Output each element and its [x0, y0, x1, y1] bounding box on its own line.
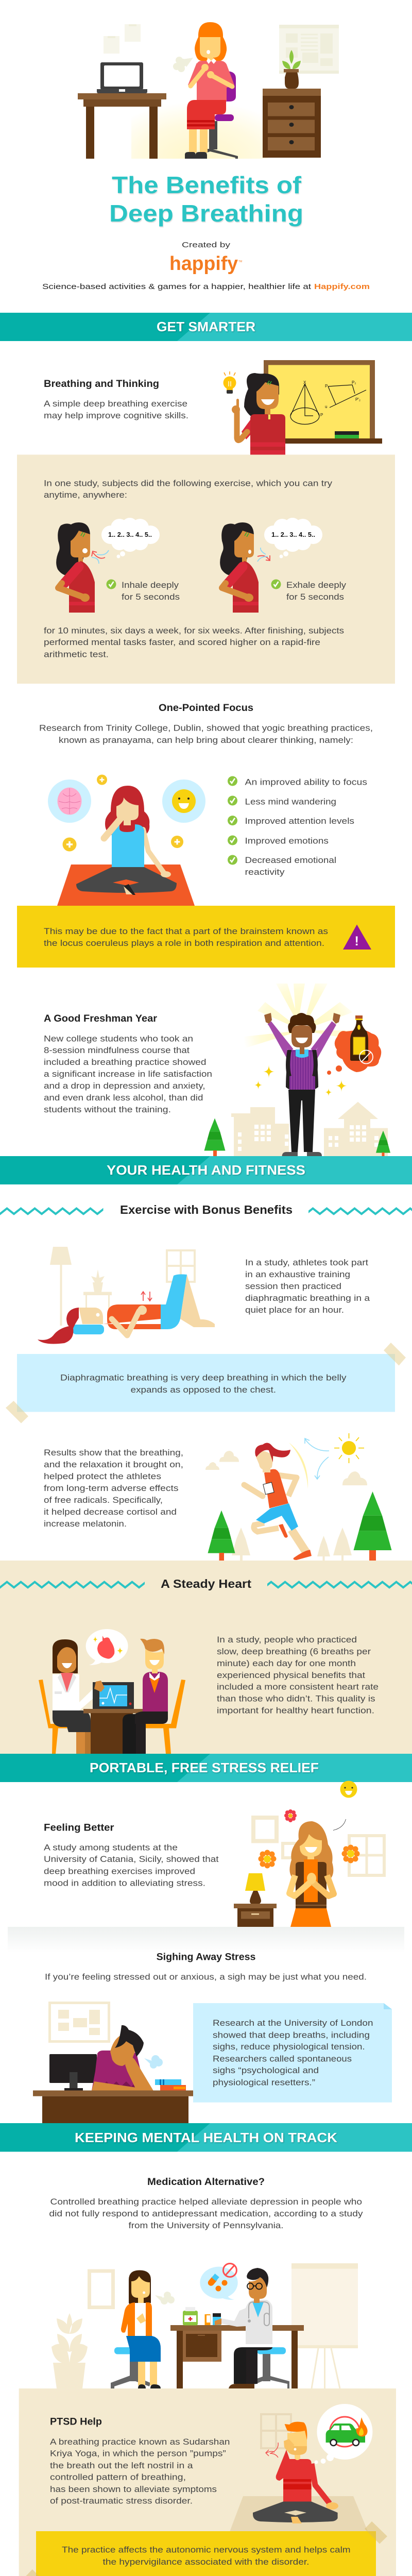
computer monitor [49, 2054, 97, 2091]
breath puff [155, 2292, 175, 2304]
clouds [205, 1451, 367, 1485]
heart study text: important for healthy heart function. [217, 1705, 374, 1716]
wall board [49, 2003, 109, 2041]
heart study text [217, 1635, 379, 1716]
callout: locus coeruleus [17, 906, 395, 968]
heart study text: In a study, people who practiced [217, 1635, 357, 1645]
heart study text: experienced physical benefits that [217, 1670, 365, 1680]
exhale label: Exhale deeply [286, 580, 347, 590]
PTSD text: of post-traumatic stress disorder. [50, 2496, 193, 2506]
exhale label: for 5 seconds [286, 592, 344, 602]
logo: happify: TM [238, 260, 242, 263]
callout: diaphragmatic breathing definition: Diaphragmatic breathing is very deep breathing in which the belly [60, 1373, 347, 1383]
exhale label [271, 579, 347, 602]
smiley balloon [333, 1781, 357, 1830]
benefit list [228, 776, 367, 877]
medication text: Controlled breathing practice helped alleviate depression in people who [50, 2197, 362, 2207]
woman doctor [53, 1639, 100, 1754]
results text: it helped decrease cortisol and [44, 1507, 177, 1517]
section: feeling better [44, 1781, 384, 1927]
woman [289, 1821, 334, 1927]
feeling better text: deep breathing exercises improved [44, 1867, 195, 1876]
title: The Benefits of [112, 172, 302, 198]
callout: autonomic nervous system: The practice affects the autonomic nervous system and helps calm [62, 2545, 351, 2554]
flowers [259, 1809, 359, 1868]
feeling better text [44, 1843, 219, 1888]
banner: your health and fitness: YOUR HEALTH AND FITNESS [107, 1162, 305, 1178]
scene: man breathing [230, 2404, 372, 2531]
chalkboard: X [303, 380, 306, 385]
arrows: belly rising [141, 1292, 152, 1301]
benefit list: Less mind wandering [245, 796, 336, 807]
logo: happify: happify [169, 253, 238, 275]
medication text [49, 2197, 363, 2230]
heading: A Steady Heart [161, 1577, 251, 1590]
title [109, 172, 303, 227]
scene: lying woman belly breathing [38, 1247, 215, 1344]
scene: doctor and patient [39, 1629, 185, 1754]
exercise result: arithmetic test. [44, 649, 109, 659]
thought bubble: car fire [314, 2404, 372, 2464]
exercise result: performed mental tasks faster, and scored higher on a rapid-fire [44, 637, 320, 647]
focus text [39, 723, 373, 745]
icon: warning triangle [343, 924, 371, 950]
panel: breathing exercise [17, 454, 395, 684]
sparkles [254, 1065, 347, 1096]
feeling better text: mood in addition to alleviating stress. [44, 1878, 205, 1888]
woman [185, 22, 234, 159]
created by: Created by [182, 241, 231, 249]
callout: autonomic nervous system: the hypervigilance associated with the disorder. [103, 2557, 309, 2567]
chair [196, 71, 238, 159]
callout: London research: physiological resetters.” [213, 2078, 315, 2088]
freshman text: a significant increase in life satisfaction [44, 1069, 212, 1079]
heading [0, 1577, 412, 1590]
icon: light bulb [224, 371, 236, 394]
medication text: from the University of Pennsylvania. [129, 2221, 283, 2230]
panel: PTSD help [19, 2388, 396, 2576]
banner: get smarter [0, 313, 412, 341]
focus text: Research from Trinity College, Dublin, showed that yogic breathing practices, [39, 723, 373, 733]
runner [244, 1443, 312, 1560]
heading: PTSD Help [50, 2416, 102, 2428]
exercise intro: anytime, anywhere: [44, 490, 127, 500]
trees [208, 1492, 391, 1561]
table [170, 2325, 304, 2388]
tagline: Happify.com [314, 283, 370, 291]
section: a good freshman year [44, 984, 390, 1156]
feeling better text: A study among students at the [44, 1843, 178, 1853]
section: sighing away stress [8, 1927, 404, 2123]
tagline: Science-based activities & games for a happier, healthier life at [42, 283, 311, 291]
inhale figure [56, 518, 160, 613]
intro text [44, 399, 188, 420]
results text: and the relaxation it brought on, [44, 1460, 183, 1469]
banner: get smarter: GET SMARTER [157, 319, 255, 334]
chalkboard: P′₂ [355, 397, 360, 402]
books [155, 2079, 186, 2091]
benefit list: Improved attention levels [245, 816, 354, 826]
exercise result: for 10 minutes, six days a week, for six weeks. After finishing, subjects [44, 625, 344, 636]
heading: exercise with bonus benefits [0, 1203, 412, 1216]
athletes text: in an exhaustive training [245, 1269, 350, 1279]
nightstand and lamp [234, 1873, 277, 1927]
buildings [231, 1102, 388, 1156]
freshman text [44, 1033, 212, 1114]
chalkboard: P₂ [352, 380, 356, 385]
callout: diaphragmatic breathing definition [6, 1343, 406, 1423]
trees [204, 1118, 390, 1156]
chalkboard [264, 360, 382, 444]
desk [33, 2091, 198, 2123]
results text: Results show that the breathing, [44, 1448, 183, 1458]
banner: keeping mental health on track [0, 2123, 412, 2151]
woman lying [38, 1274, 215, 1344]
sun and air arrows [289, 1433, 364, 1489]
speech bubble: no pills [200, 2264, 238, 2300]
plus icons [63, 775, 183, 851]
sighing person [92, 2025, 153, 2091]
yoga woman [57, 786, 195, 906]
callout: London research: Research at the University of London [213, 2018, 373, 2028]
chairs [39, 1680, 185, 1754]
room decor [253, 1818, 384, 1875]
results text: from long-term adverse effects [44, 1483, 178, 1493]
heading: One-Pointed Focus [159, 702, 253, 714]
desk [78, 93, 166, 159]
scene: runner outdoors [205, 1433, 391, 1561]
feeling better text: University of Catania, Sicily, showed that [44, 1854, 219, 1864]
scene: smiling woman [234, 1781, 384, 1927]
banner: portable, free stress relief: PORTABLE, FREE STRESS RELIEF [90, 1760, 319, 1775]
callout: London research: showed that deep breaths, including [213, 2030, 370, 2040]
window and mat [230, 2414, 368, 2531]
patient chair [111, 2347, 150, 2388]
section: one-pointed focus [17, 702, 395, 968]
chalkboard: P [320, 413, 323, 417]
potted plant [282, 50, 301, 89]
doctor [215, 2268, 272, 2388]
male patient [123, 1639, 168, 1754]
heading: exercise with bonus benefits: Exercise with Bonus Benefits [120, 1203, 293, 1216]
thought bubble: no alcohol [327, 1015, 381, 1075]
meditating man [253, 2422, 338, 2523]
exercise result [44, 625, 344, 659]
focus text: known as pranayama, can help bring about clearer thinking, namely: [59, 735, 353, 745]
background glow [131, 82, 268, 159]
heart study text: than those who didn’t. This quality is [217, 1694, 375, 1704]
heart study text: minute) each day for one month [217, 1658, 356, 1668]
benefit list: reactivity [245, 867, 285, 877]
laptop [97, 62, 147, 93]
exhale figure: 1.. 2.. 3.. 4.. 5.. [271, 531, 315, 538]
results text: of free radicals. Specifically, [44, 1495, 163, 1505]
athletes text: In a study, athletes took part [245, 1258, 368, 1267]
medication text: did not fully respond to antidepressant medication, according to a study [49, 2209, 363, 2218]
callout: London research: sighs “psychological and [213, 2065, 319, 2075]
freshman text: and a drop in depression and anxiety, [44, 1081, 205, 1091]
speech bubble: heart [86, 1629, 128, 1665]
banner: portable, free stress relief [0, 1754, 412, 1782]
results text [44, 1448, 183, 1529]
heading: Feeling Better [44, 1822, 114, 1833]
callout: locus coeruleus: This may be due to the fact that a part of the brainstem known as [44, 926, 328, 936]
callout: autonomic nervous system [25, 2521, 387, 2576]
breath arrows [266, 2443, 278, 2458]
athletes text: session then practiced [245, 1281, 341, 1291]
results text: helped protect the athletes [44, 1471, 161, 1481]
PTSD text: controlled pattern of breathing, [50, 2472, 186, 2482]
heading: A Good Freshman Year [44, 1013, 157, 1024]
PTSD text: A breathing practice known as Sudarshan [50, 2437, 230, 2447]
title: Deep Breathing [109, 200, 303, 227]
scene: patient and doctor [52, 2263, 358, 2388]
panel: a steady heart [0, 1561, 412, 1754]
happy student [264, 1013, 340, 1156]
benefit list: An improved ability to focus [245, 777, 367, 787]
callout: diaphragmatic breathing definition: expands as opposed to the chest. [131, 1385, 276, 1395]
results text: increase melatonin. [44, 1519, 127, 1529]
wall notes [104, 24, 141, 54]
athletes text: quiet place for an hour. [245, 1305, 344, 1315]
callout: locus coeruleus: the locus coeruleus plays a role in both respiration and attention. [44, 938, 324, 948]
intro text: A simple deep breathing exercise [44, 399, 187, 409]
freshman text: students without the training. [44, 1105, 171, 1114]
desk and monitor [83, 1681, 143, 1754]
room background [50, 1247, 196, 1326]
chalkboard: u [325, 404, 327, 409]
teacher [232, 373, 285, 454]
PTSD text: has been shown to alleviate symptoms [50, 2484, 217, 2494]
section: medication alternative [49, 2176, 363, 2388]
PTSD text [50, 2437, 230, 2506]
freshman text: and even drank less alcohol, than did [44, 1093, 203, 1103]
wall chart [279, 25, 339, 74]
room decor [52, 2263, 358, 2388]
benefit list: Improved emotions [245, 836, 329, 845]
athletes text [245, 1258, 370, 1315]
athletes text: diaphragmatic breathing in a [245, 1293, 370, 1303]
heading: Breathing and Thinking [44, 378, 159, 389]
exercise intro: In one study, subjects did the following exercise, which you can try [44, 478, 333, 488]
PTSD text: Kriya Yoga, in which the person ”pumps” [50, 2449, 226, 2459]
heart study text: slow, deep breathing (6 breaths per [217, 1647, 371, 1656]
section: breathing and thinking [44, 360, 382, 454]
inhale label: Inhale deeply [122, 580, 179, 590]
heading: Medication Alternative? [147, 2176, 265, 2188]
hero illustration: woman breathing at her desk [78, 22, 339, 159]
chalkboard: P [325, 384, 328, 388]
sigh text: If you’re feeling stressed out or anxious, a sigh may be just what you need. [45, 1972, 367, 1982]
exercise intro [44, 478, 333, 500]
heading: Sighing Away Stress [157, 1952, 256, 1963]
callout: London research: sighs, reduce physiological tension. [213, 2042, 365, 2052]
heart study text: included a more consistent heart rate [217, 1682, 379, 1691]
inhale label [106, 579, 180, 602]
icon: happy face [162, 779, 205, 823]
cabinet [263, 89, 321, 158]
freshman text: included a breathing practice showed [44, 1057, 206, 1067]
icon: brain [48, 779, 91, 823]
banner: keeping mental health on track: KEEPING MENTAL HEALTH ON TRACK [75, 2130, 337, 2145]
icon: warning triangle: ! [354, 934, 359, 948]
tagline [42, 283, 370, 291]
patient [121, 2270, 161, 2388]
callout: London research: Researchers called spontaneous [213, 2054, 352, 2064]
PTSD text: the breath out the left nostril in a [50, 2461, 193, 2470]
inhale figure: 1.. 2.. 3.. 4.. 5.. [108, 531, 152, 538]
exhale figure [220, 518, 322, 613]
benefit list: Decreased emotional [245, 855, 336, 865]
callout: London research [193, 2003, 392, 2103]
breath puff [173, 57, 193, 72]
banner: your health and fitness [0, 1156, 412, 1184]
sun rays [244, 984, 360, 1048]
sigh puff [144, 2055, 163, 2069]
doctor chair [252, 2347, 289, 2388]
inhale label: for 5 seconds [122, 592, 180, 602]
freshman text: 8-session mindfulness course that [44, 1045, 190, 1055]
intro text: may help improve cognitive skills. [44, 411, 188, 420]
freshman text: New college students who took an [44, 1033, 193, 1043]
medicine bottles [183, 2307, 221, 2326]
